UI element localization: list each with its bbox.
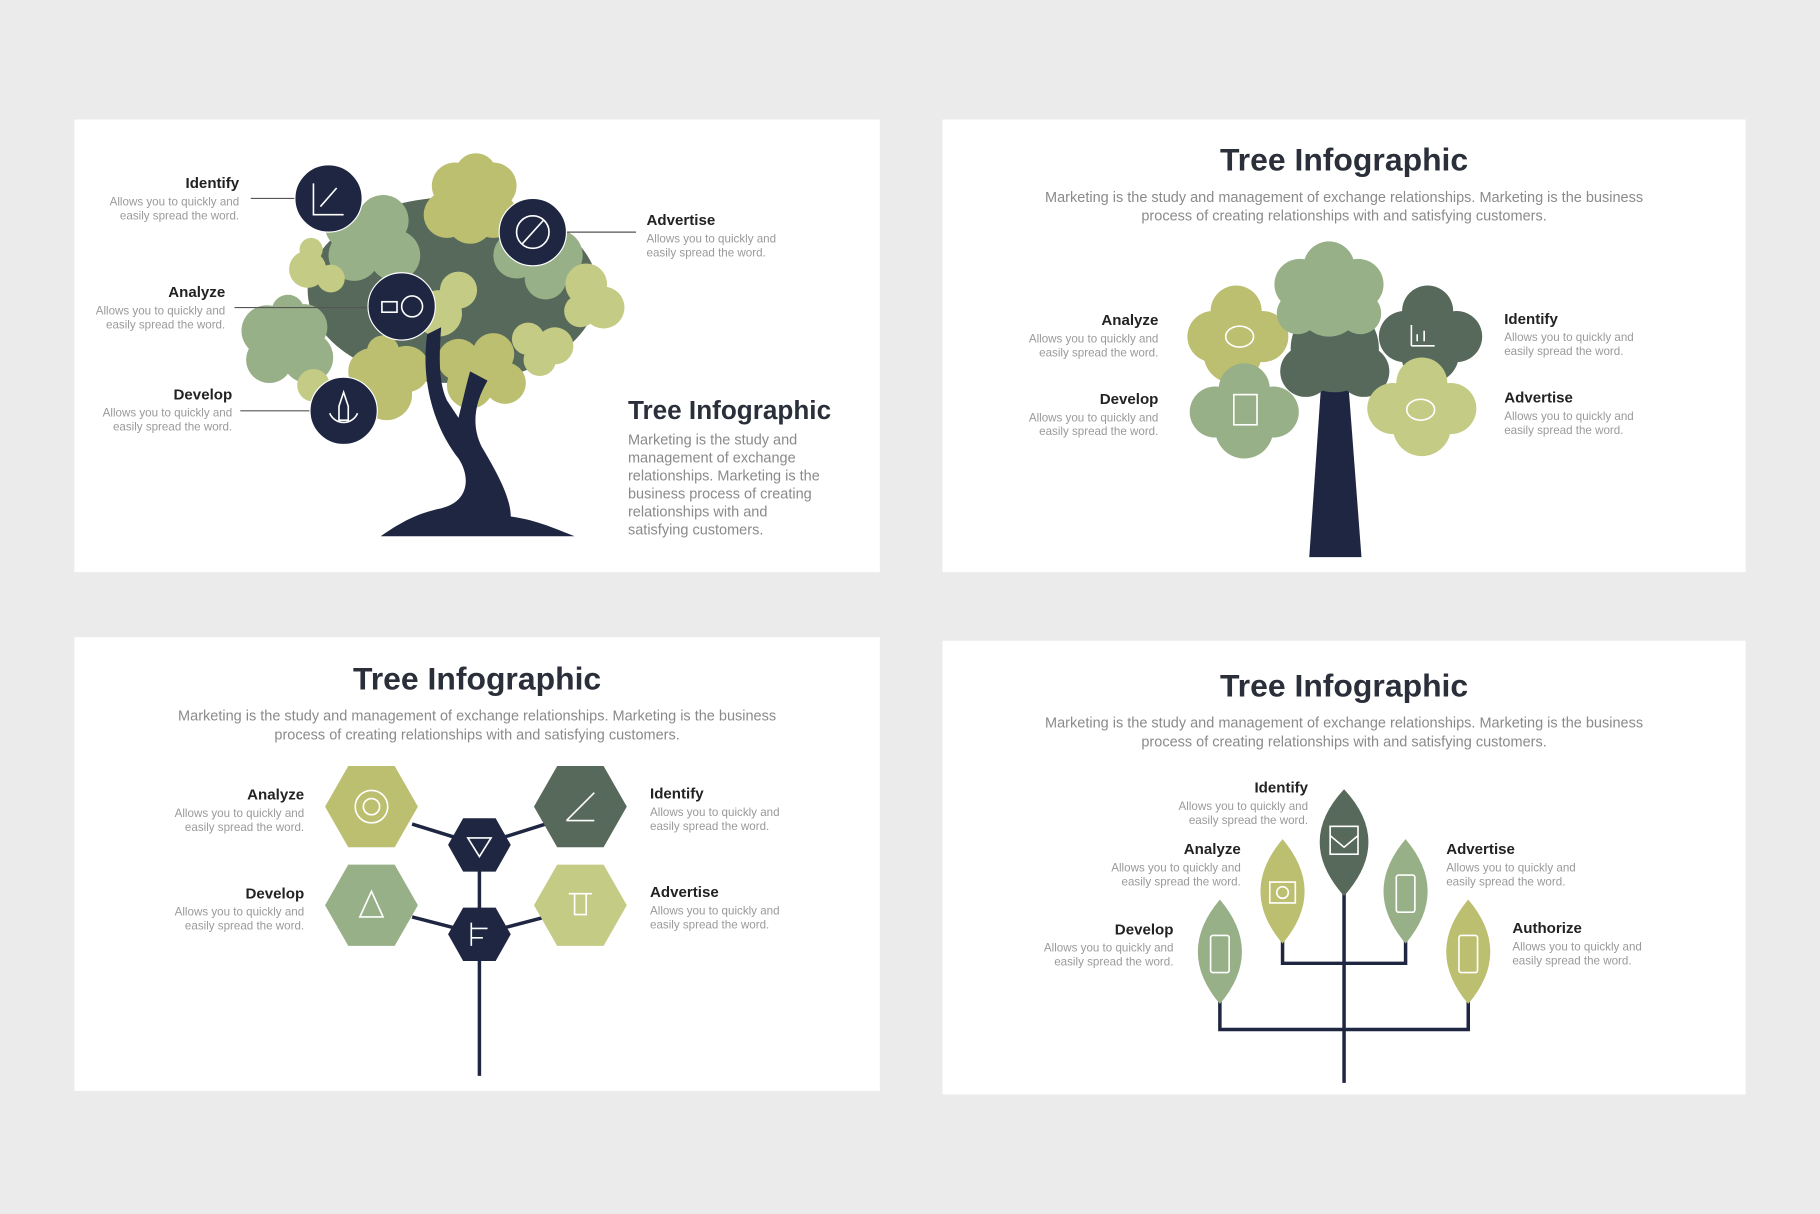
- hex icons: [355, 790, 594, 946]
- subtitle: Marketing is the study and management of exchange relationships. Marketing is the business: [178, 709, 776, 725]
- labels: easily spread the word.: [1504, 345, 1623, 358]
- title block: satisfying customers.: [628, 522, 763, 538]
- icon circle: identify: [295, 165, 362, 232]
- labels: Identify: [1254, 780, 1309, 797]
- labels: easily spread the word.: [185, 920, 304, 933]
- subtitle: Marketing is the study and management of exchange relationships. Marketing is the business: [1045, 190, 1643, 206]
- labels: [1044, 780, 1642, 969]
- branches: [1220, 894, 1468, 1083]
- label: analyze: easily spread the word.: [106, 318, 225, 331]
- labels: easily spread the word.: [1189, 814, 1308, 827]
- labels: Allows you to quickly and: [1111, 862, 1241, 875]
- labels: Analyze: [247, 787, 304, 804]
- labels: [175, 786, 780, 933]
- subtitle: process of creating relationships with and satisfying customers.: [274, 727, 680, 743]
- labels: Advertise: [1446, 841, 1515, 858]
- label: analyze: [96, 284, 225, 331]
- labels: [1029, 311, 1634, 438]
- labels: Analyze: [1184, 841, 1241, 858]
- icons: [1226, 325, 1435, 425]
- title: Tree Infographic: [1220, 142, 1468, 178]
- labels: Allows you to quickly and: [650, 905, 780, 918]
- labels: Identify: [1504, 311, 1558, 328]
- label: analyze: Analyze: [168, 284, 225, 301]
- labels: Allows you to quickly and: [1512, 941, 1642, 954]
- labels: easily spread the word.: [1039, 346, 1158, 359]
- labels: Advertise: [650, 884, 719, 901]
- labels: Allows you to quickly and: [175, 807, 304, 820]
- label: identify: Identify: [186, 175, 240, 192]
- title block: Tree Infographic: [628, 395, 831, 425]
- icon circle: advertise: [499, 198, 566, 266]
- labels: easily spread the word.: [650, 820, 769, 833]
- icon circle: develop: [310, 377, 377, 445]
- title block: Marketing is the study and: [628, 433, 797, 449]
- labels: easily spread the word.: [185, 821, 304, 834]
- panel: top-right tree: [942, 120, 1746, 572]
- labels: Develop: [1115, 921, 1173, 938]
- labels: Allows you to quickly and: [1504, 410, 1634, 423]
- label: advertise: Allows you to quickly and: [647, 233, 776, 246]
- subtitle: [1045, 716, 1643, 750]
- title block: relationships. Marketing is the: [628, 468, 820, 484]
- title block: management of exchange: [628, 451, 796, 467]
- labels: Analyze: [1101, 312, 1158, 329]
- title: Tree Infographic: [1220, 667, 1468, 703]
- title block: business process of creating: [628, 486, 812, 502]
- stem and connectors: [412, 824, 546, 1076]
- subtitle: process of creating relationships with and satisfying customers.: [1141, 734, 1547, 750]
- canopy: [1187, 241, 1482, 458]
- label: advertise: easily spread the word.: [647, 246, 766, 259]
- hexagons: [325, 766, 627, 961]
- leaf icons: [1211, 826, 1478, 973]
- panel: bottom-right leaves: [942, 641, 1746, 1094]
- labels: Allows you to quickly and: [1044, 942, 1173, 955]
- labels: Develop: [1100, 391, 1158, 408]
- title block: [628, 395, 831, 538]
- labels: Allows you to quickly and: [1029, 411, 1158, 424]
- labels: Advertise: [1504, 390, 1573, 407]
- label: develop: Allows you to quickly and: [103, 407, 232, 420]
- labels: Allows you to quickly and: [650, 806, 780, 819]
- label: analyze: Allows you to quickly and: [96, 305, 225, 318]
- icon circle: analyze: [368, 273, 435, 340]
- title: Tree Infographic: [353, 660, 601, 696]
- label: develop: easily spread the word.: [113, 421, 232, 434]
- title block: relationships with and: [628, 504, 767, 520]
- subtitle: process of creating relationships with and satisfying customers.: [1141, 209, 1547, 225]
- panel: top-left tree: [74, 120, 880, 572]
- tree trunk: [381, 327, 575, 536]
- subtitle: Marketing is the study and management of exchange relationships. Marketing is the business: [1045, 716, 1643, 732]
- label: identify: [110, 175, 240, 222]
- labels: Identify: [650, 786, 704, 803]
- labels: easily spread the word.: [650, 918, 769, 931]
- labels: Allows you to quickly and: [1179, 800, 1308, 813]
- subtitle: [178, 709, 776, 743]
- callout lines: [235, 198, 636, 411]
- labels: easily spread the word.: [1504, 424, 1623, 437]
- labels: Develop: [246, 885, 304, 902]
- leaves: [1198, 789, 1490, 1004]
- label: identify: easily spread the word.: [120, 209, 239, 222]
- label: advertise: [647, 212, 776, 259]
- labels: Allows you to quickly and: [1446, 862, 1576, 875]
- labels: easily spread the word.: [1512, 954, 1632, 967]
- labels: easily spread the word.: [1054, 956, 1173, 969]
- labels: easily spread the word.: [1446, 876, 1565, 889]
- labels: easily spread the word.: [1039, 425, 1158, 438]
- labels: Authorize: [1512, 920, 1582, 937]
- labels: Allows you to quickly and: [1029, 332, 1158, 345]
- subtitle: [1045, 190, 1643, 225]
- labels: easily spread the word.: [1122, 876, 1241, 889]
- label: identify: Allows you to quickly and: [110, 195, 239, 208]
- trunk: [1309, 389, 1361, 557]
- tree canopy: [241, 153, 624, 420]
- label: develop: Develop: [174, 386, 232, 403]
- labels: Allows you to quickly and: [1504, 331, 1634, 344]
- labels: Allows you to quickly and: [175, 906, 304, 919]
- label: develop: [103, 386, 232, 434]
- panel: bottom-left hexagons: [74, 637, 880, 1091]
- label: advertise: Advertise: [647, 212, 715, 229]
